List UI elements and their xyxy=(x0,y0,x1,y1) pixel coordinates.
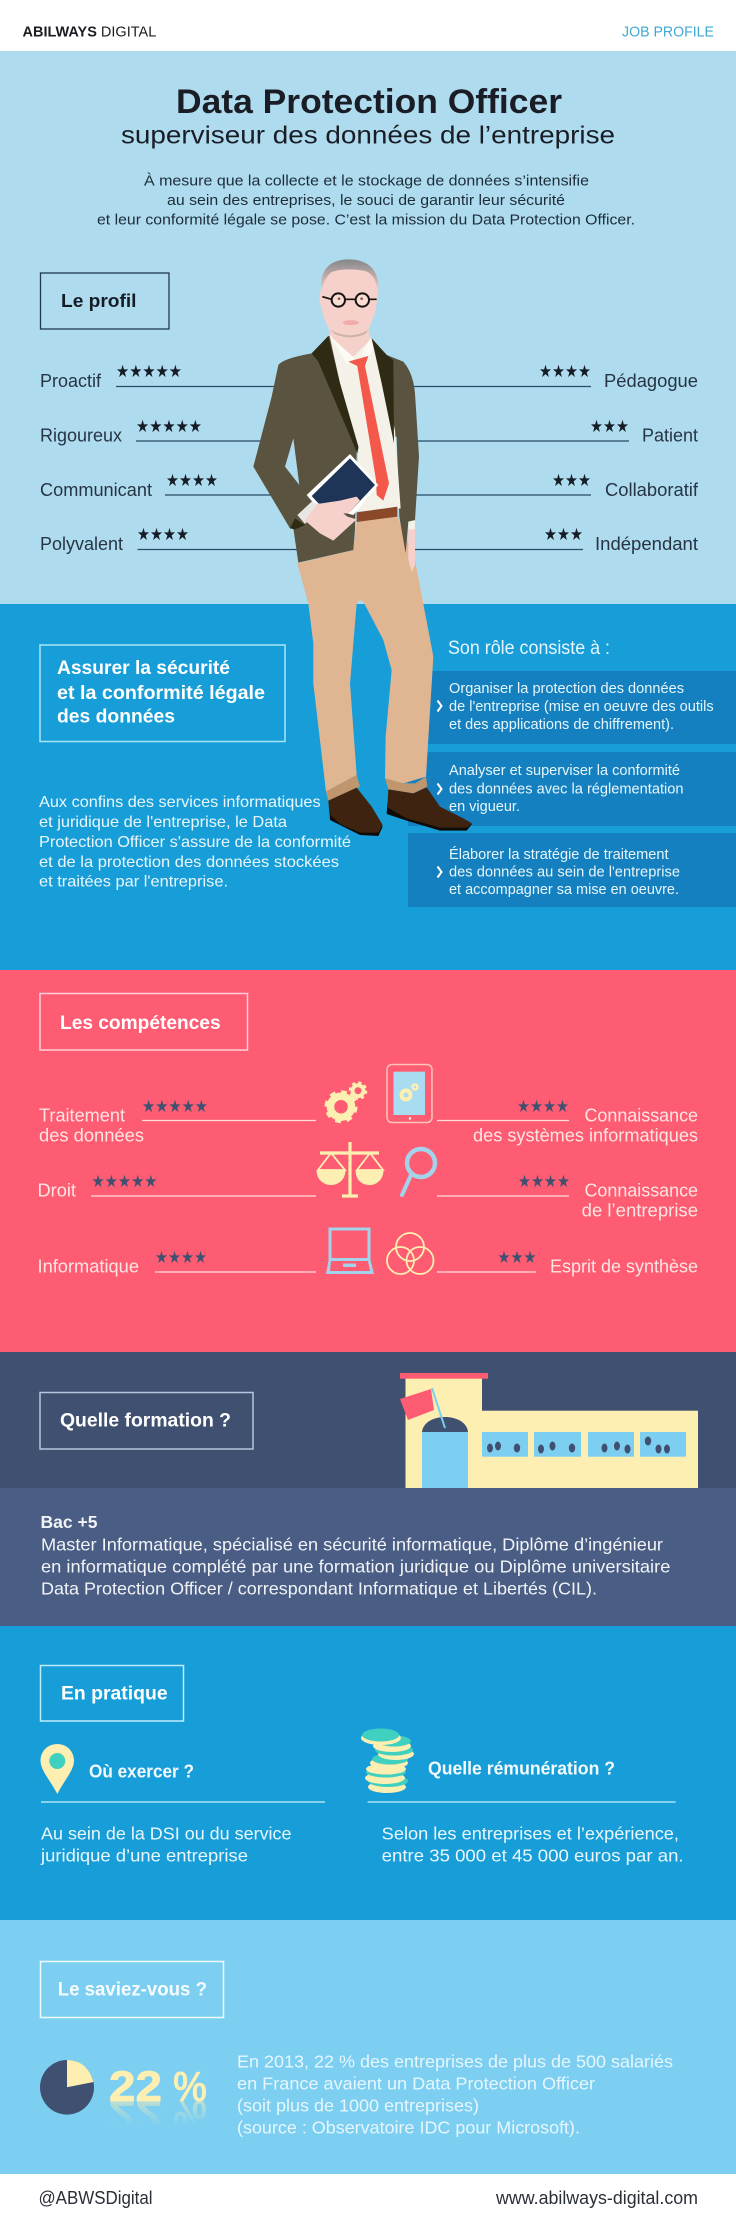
role step 3: Élaborer la stratégie de traitement xyxy=(449,846,669,863)
footer: @ABWSDigital xyxy=(38,2188,152,2208)
heading: Le saviez-vous: Le saviez-vous ? xyxy=(58,1980,207,2001)
heading: En pratique: En pratique xyxy=(61,1683,168,1704)
skills left xyxy=(38,1097,316,1277)
block: salary: Selon les entreprises et l’expérience, xyxy=(382,1823,679,1843)
figure: tie xyxy=(348,356,389,501)
figure: neck xyxy=(329,330,371,358)
logo: ABILWAYS DIGITAL xyxy=(22,24,156,40)
skills left: Traitement xyxy=(39,1106,125,1126)
footer xyxy=(0,2174,736,2222)
figure: trouser cuffs xyxy=(326,775,427,801)
figure: shoe soles xyxy=(329,803,472,836)
profile ratings right: ★★★★ xyxy=(539,362,591,382)
icon: magnifying glass xyxy=(402,1149,435,1195)
statistic: 22 % xyxy=(109,2063,207,2139)
role description text: et juridique de l'entreprise, le Data xyxy=(39,814,287,831)
figure: book xyxy=(307,454,378,515)
role step 3: des données au sein de l'entreprise xyxy=(449,864,680,881)
role step backgrounds xyxy=(408,671,736,907)
skills left: Informatique xyxy=(38,1257,139,1277)
heading: Assurer la sécurité: Assurer la sécurité xyxy=(57,657,230,679)
skills right: ★★★ xyxy=(498,1248,536,1268)
heading: Assurer la sécurité xyxy=(40,645,285,742)
role description text: Protection Officer s'assure de la conformité xyxy=(39,834,351,851)
profile ratings left xyxy=(40,362,300,554)
skills left: ★★★★ xyxy=(155,1248,207,1268)
skills right: Esprit de synthèse xyxy=(550,1257,698,1277)
role step 2 xyxy=(438,762,684,815)
icon: gears xyxy=(327,1083,366,1121)
icon: scales xyxy=(316,1142,384,1196)
skills right: Connaissance xyxy=(584,1106,698,1126)
heading: Assurer la sécurité: des données xyxy=(57,706,175,728)
statistic: 22 %: 22 xyxy=(109,2091,162,2139)
panel: did you know background xyxy=(0,1920,736,2174)
icon: venn diagram xyxy=(387,1233,434,1274)
skills right: ★★★★ xyxy=(518,1172,570,1192)
block: salary xyxy=(368,1759,684,1866)
subtitle: superviseur des données de l’entreprise xyxy=(121,122,615,150)
heading: Assurer la sécurité: et la conformité légale xyxy=(57,682,265,704)
profile ratings right: Indépendant xyxy=(595,534,698,554)
panel: training detail background xyxy=(0,1488,736,1626)
role step 2: des données avec la réglementation xyxy=(449,780,684,797)
profile ratings right: ★★★ xyxy=(590,417,629,437)
heading: En pratique xyxy=(40,1666,184,1721)
training text: Bac +5 xyxy=(40,1512,98,1532)
panel: skills background xyxy=(0,970,736,1352)
block: where to work xyxy=(40,1761,325,1866)
intro text: et leur conformité légale se pose. C’est la mission du Data Protection Officer. xyxy=(97,212,635,229)
role description text: Aux confins des services informatiques xyxy=(39,794,321,811)
skills right: des systèmes informatiques xyxy=(473,1126,698,1146)
role step 2: Analyser et superviser la conformité xyxy=(449,762,680,779)
profile ratings right: Pédagogue xyxy=(604,371,698,391)
role step 1: de l'entreprise (mise en oeuvre des outils xyxy=(449,698,714,715)
statistic text: (source : Observatoire IDC pour Microsoft). xyxy=(237,2117,580,2137)
figure: trousers xyxy=(297,516,433,792)
pie chart: 22 percent xyxy=(40,2060,94,2115)
heading: Quelle formation: Quelle formation ? xyxy=(60,1411,231,1432)
heading: Le saviez-vous xyxy=(40,1962,224,2018)
skills right: ★★★★ xyxy=(517,1097,569,1117)
heading: Les compétences xyxy=(40,994,248,1050)
skills left: des données xyxy=(39,1126,144,1146)
figure: shirt xyxy=(329,335,401,512)
profile ratings left: Rigoureux xyxy=(40,426,122,446)
intro text xyxy=(97,173,635,229)
header label: JOB PROFILE xyxy=(622,24,714,40)
illustration: school building xyxy=(400,1373,698,1488)
profile ratings left: Communicant xyxy=(40,480,152,500)
figure: jacket xyxy=(253,336,419,563)
heading: Le profil xyxy=(40,273,169,329)
profile ratings right: Collaboratif xyxy=(605,480,699,500)
figure: right hand xyxy=(408,521,415,572)
role step 1: Organiser la protection des données xyxy=(449,680,684,697)
training text: en informatique complété par une formation juridique ou Diplôme universitaire xyxy=(41,1557,670,1577)
role step 3: et accompagner sa mise en oeuvre. xyxy=(449,881,679,898)
icon: location pin xyxy=(40,1744,74,1794)
icon: tablet xyxy=(387,1064,432,1122)
intro text: au sein des entreprises, le souci de garantir leur sécurité xyxy=(167,192,565,209)
profile ratings right: ★★★ xyxy=(544,525,583,545)
skills right xyxy=(437,1097,698,1277)
statistic: 22 %: % xyxy=(173,2091,207,2139)
skills left: ★★★★★ xyxy=(92,1172,158,1192)
profile ratings left: Proactif xyxy=(40,371,102,391)
figure: left cuff xyxy=(297,502,322,524)
statistic text: En 2013, 22 % des entreprises de plus de 500 salariés xyxy=(237,2052,673,2072)
block: where to work: Au sein de la DSI ou du service xyxy=(41,1823,292,1843)
training text: Master Informatique, spécialisé en sécurité informatique, Diplôme d’ingénieur xyxy=(41,1535,663,1555)
statistic: 22 %: 22 xyxy=(109,2063,162,2111)
statistic text xyxy=(237,2052,673,2137)
figure: belt xyxy=(357,507,397,522)
header band xyxy=(0,0,736,51)
statistic text: (soit plus de 1000 entreprises) xyxy=(237,2096,479,2116)
panel: training background xyxy=(0,1352,736,1488)
figure: sleeve end xyxy=(290,518,305,529)
icon: coin stack xyxy=(361,1728,414,1793)
icon: laptop xyxy=(326,1229,374,1274)
statistic text: en France avaient un Data Protection Officer xyxy=(237,2074,595,2094)
role description text xyxy=(39,794,351,891)
profile ratings right: Patient xyxy=(642,426,698,446)
panel: role background xyxy=(0,604,736,970)
skills left: ★★★★★ xyxy=(142,1097,208,1117)
role step 2: en vigueur. xyxy=(449,798,520,815)
role description text: et traitées par l'entreprise. xyxy=(39,874,228,891)
profile ratings left: ★★★★★ xyxy=(136,417,202,437)
profile ratings right: ★★★ xyxy=(552,471,591,491)
footer: www.abilways-digital.com xyxy=(495,2188,698,2208)
profile ratings right xyxy=(400,362,699,554)
role heading: Son rôle consiste à : xyxy=(448,638,610,659)
illustration: data protection officer figure xyxy=(253,259,472,836)
block: salary: Quelle rémunération ? xyxy=(428,1759,615,1779)
skills right: Connaissance xyxy=(584,1181,698,1201)
block: where to work: Où exercer ? xyxy=(89,1761,194,1781)
skills right: de l’entreprise xyxy=(582,1201,698,1221)
panel: in practice background xyxy=(0,1626,736,1920)
figure: mouth xyxy=(343,320,359,325)
profile ratings left: ★★★★★ xyxy=(116,362,182,382)
heading: Le profil: Le profil xyxy=(61,291,136,311)
figure: left hand xyxy=(305,497,360,541)
figure: lapels xyxy=(312,336,394,453)
statistic: 22 %: % xyxy=(173,2063,207,2111)
intro text: À mesure que la collecte et le stockage de données s’intensifie xyxy=(144,173,589,190)
panel: intro and profile background xyxy=(0,51,736,604)
role description text: et de la protection des données stockées xyxy=(39,854,339,871)
figure: shoes xyxy=(328,787,472,833)
heading: Les compétences: Les compétences xyxy=(60,1013,221,1034)
figure: head xyxy=(319,268,378,337)
role step 3 xyxy=(438,846,680,898)
figure: hair xyxy=(321,259,378,292)
block: where to work: juridique d’une entreprise xyxy=(40,1846,248,1866)
figure: chin shadow xyxy=(331,330,368,337)
profile ratings left: Polyvalent xyxy=(40,534,123,554)
role step 1 xyxy=(438,680,714,733)
block: salary: entre 35 000 et 45 000 euros par an. xyxy=(382,1846,684,1866)
training text xyxy=(40,1512,670,1599)
role step 1: et des applications de chiffrement). xyxy=(449,716,674,733)
profile ratings left: ★★★★ xyxy=(137,525,189,545)
heading: Quelle formation xyxy=(40,1392,253,1449)
training text: Data Protection Officer / correspondant Informatique et Libertés (CIL). xyxy=(41,1579,597,1599)
skills left: Droit xyxy=(38,1181,76,1201)
figure: glasses xyxy=(322,293,377,307)
title: Data Protection Officer xyxy=(176,83,562,121)
figure: collar xyxy=(329,335,373,365)
profile ratings left: ★★★★ xyxy=(166,471,218,491)
